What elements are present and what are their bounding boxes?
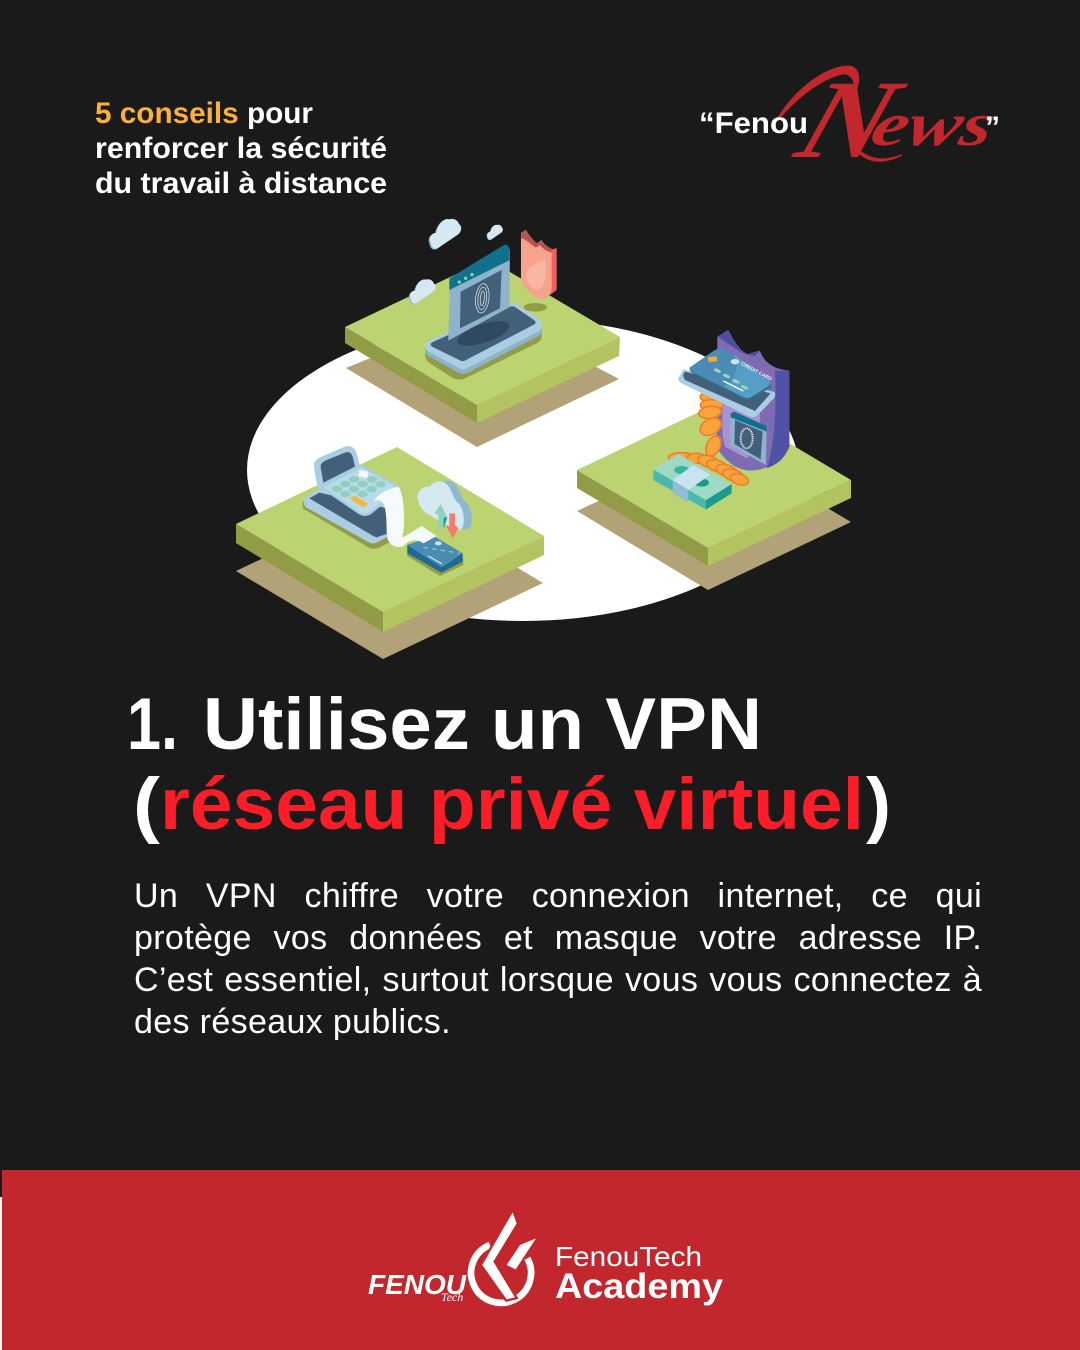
body paragraph: des réseaux publics. (134, 1003, 451, 1041)
icon: phone with credit card (678, 348, 775, 417)
white ellipse backdrop (247, 319, 799, 621)
body paragraph: Un VPN chiffre votre connexion internet, ce qui (134, 877, 982, 915)
icon: small fingerprint window (730, 412, 767, 465)
body paragraph: C’est essentiel, surtout lorsque vous vous connectez à (134, 961, 982, 999)
icon: gold coins (668, 391, 750, 487)
heading: tip title: Utilisez un VPN (203, 684, 762, 765)
icon: phone with credit card: CREDIT CARD (740, 361, 773, 383)
footer: FenouTech logo: FENOU (368, 1269, 467, 1300)
footer: FenouTech logo (368, 1212, 724, 1306)
icon: banknote stack (653, 454, 732, 509)
brand: Fenou News wordmark: ” (985, 111, 1000, 144)
heading: tip title: 1. (127, 684, 178, 765)
platform: top, laptop with fingerprint (345, 219, 620, 447)
brand: Fenou News wordmark (699, 58, 1004, 182)
heading: tip title: réseau privé virtuel (160, 764, 864, 845)
platform: left, calculator and cloud (236, 446, 544, 659)
icon: red shield (521, 230, 557, 312)
icon: purple shield (715, 330, 789, 471)
illustration: isometric security scene (236, 219, 851, 659)
icon: flame ring mark (471, 1212, 536, 1303)
header: series intro text: renforcer la sécurité (95, 132, 387, 165)
icon: clouds (409, 219, 503, 304)
icon: credit card (407, 536, 463, 576)
footer: red band (0, 1170, 1080, 1350)
header: series intro text: 5 conseils pour (95, 97, 314, 130)
footer: FenouTech logo: FenouTech (555, 1241, 702, 1272)
footer: FenouTech logo: Tech (441, 1290, 463, 1304)
icon: data cloud (417, 481, 472, 538)
body paragraph (134, 877, 982, 1041)
icon: phone and fingerprint window (425, 245, 542, 379)
header: series intro text (95, 97, 387, 200)
body paragraph: protège vos données et masque votre adresse IP. (134, 919, 982, 957)
heading: tip title: ) (866, 764, 891, 845)
platform: right, payments (577, 330, 851, 590)
brand: Fenou News wordmark: “Fenou (699, 107, 808, 140)
icon: receipt strip (373, 487, 437, 547)
footer: FenouTech logo: Academy (555, 1267, 724, 1306)
heading: tip title: ( (133, 764, 161, 845)
brand: Fenou News wordmark: N (781, 58, 918, 182)
heading: tip title (127, 684, 891, 845)
header: series intro text: du travail à distance (95, 167, 387, 200)
icon: calculator phone (303, 446, 403, 549)
brand: Fenou News wordmark: ews (864, 90, 1004, 159)
